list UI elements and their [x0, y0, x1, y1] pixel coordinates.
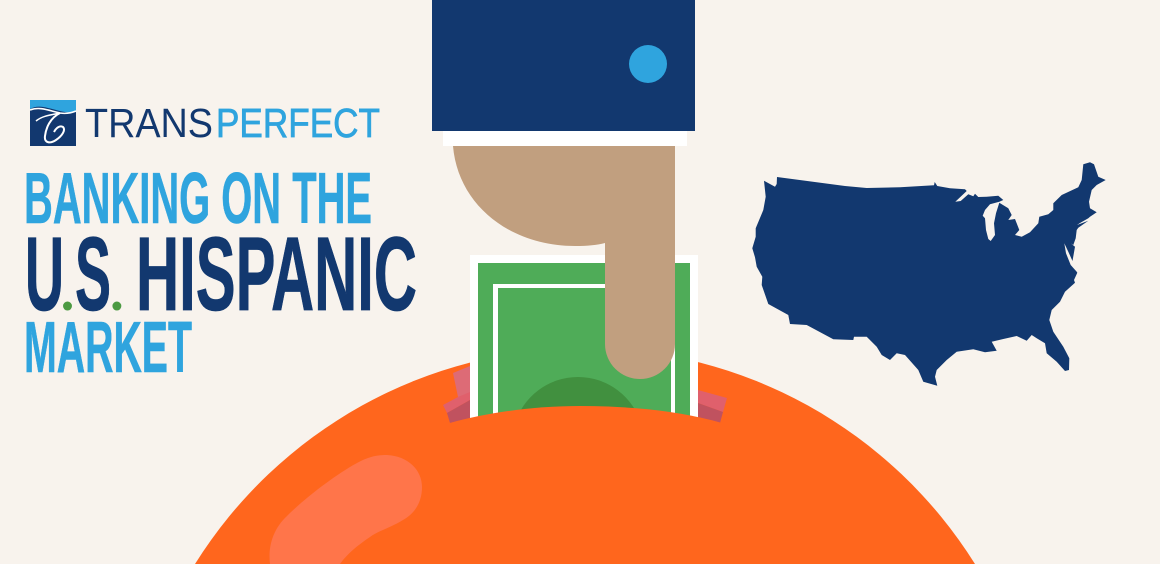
shirt cuff	[443, 131, 687, 146]
dollar bill	[470, 255, 698, 425]
title line: U.S. Hispanic	[25, 216, 417, 333]
piggy bank body	[195, 348, 975, 564]
title line: U.S. Hispanic: .	[61, 260, 74, 322]
icon: United States map	[752, 162, 1106, 386]
title line: U.S. Hispanic: .	[110, 260, 124, 322]
bill: centre portrait circle	[514, 377, 642, 425]
wordmark: TRANS: TRANS	[85, 100, 213, 146]
title line: Banking on the: BANKING ON THE	[24, 158, 372, 239]
hand with pointing finger	[453, 146, 675, 379]
logo: TransPerfect	[30, 100, 380, 146]
icon: cuff button	[629, 45, 667, 83]
title line: U.S. Hispanic: S	[75, 216, 111, 333]
title line: U.S. Hispanic: U	[25, 216, 64, 333]
sleeve	[432, 0, 695, 131]
title	[24, 158, 417, 388]
highlight on piggy bank	[270, 455, 422, 564]
slot: pink left edge	[443, 366, 470, 423]
slot: pink right edge	[698, 390, 727, 423]
title line: U.S. Hispanic: HISPANIC	[136, 216, 417, 333]
wordmark: PERFECT: PERFECT	[216, 100, 380, 146]
title line: Market: MARKET	[24, 307, 192, 388]
icon: logo square	[30, 100, 76, 146]
piggy bank front lip	[450, 406, 722, 450]
